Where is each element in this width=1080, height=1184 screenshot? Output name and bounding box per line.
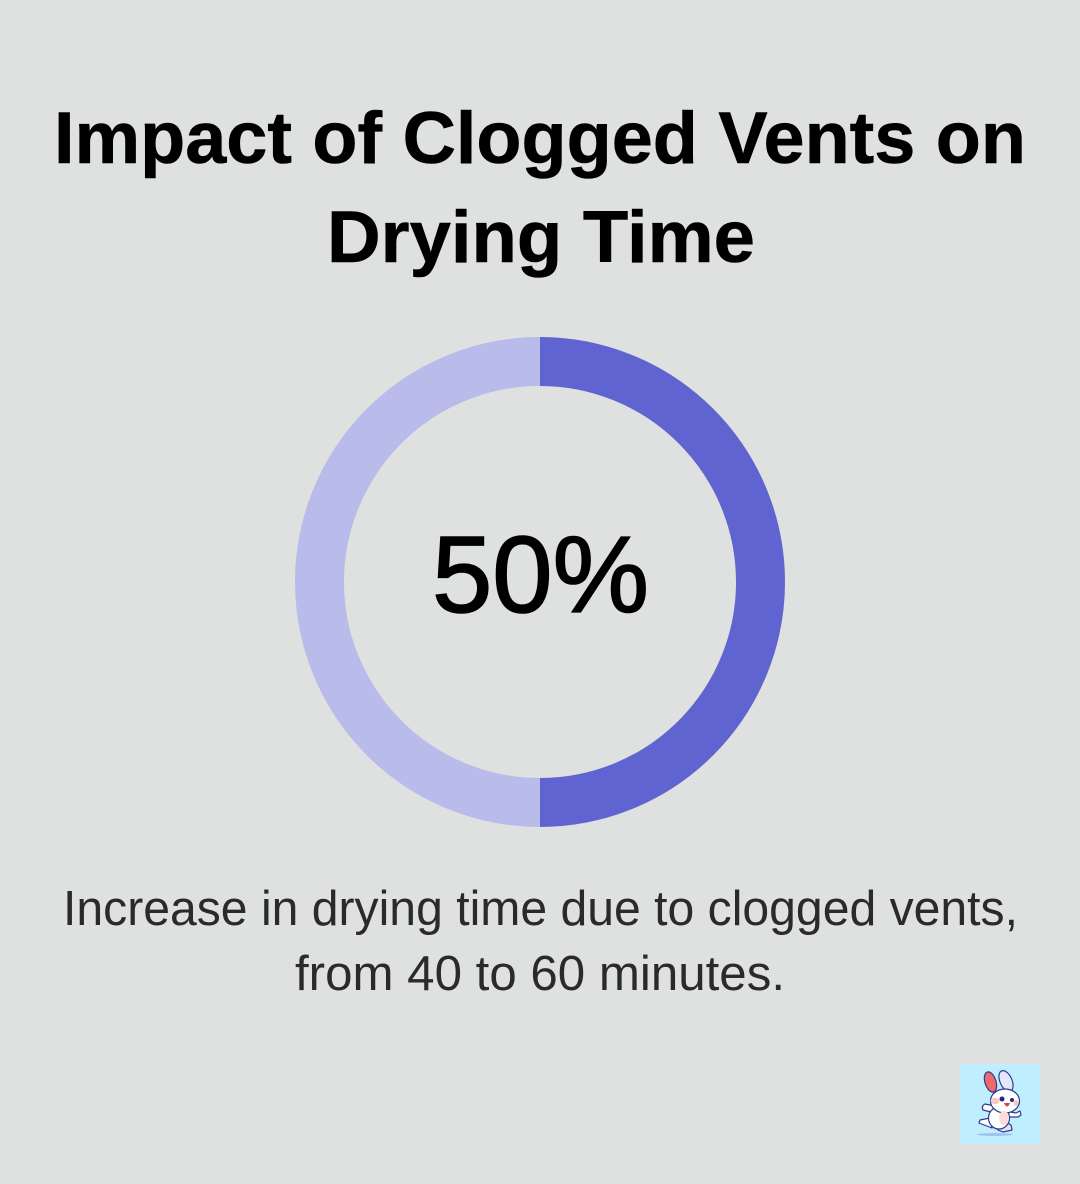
icon: rabbit logo [960, 1064, 1040, 1144]
description text [63, 882, 1018, 1001]
arms [982, 1104, 995, 1113]
title: Drying Time [327, 197, 755, 278]
head [990, 1089, 1020, 1113]
description text: from 40 to 60 minutes. [295, 947, 785, 1001]
title [54, 98, 1026, 278]
highlighted ring segment [540, 362, 760, 802]
body [988, 1107, 1010, 1129]
title: Impact of Clogged Vents on [54, 98, 1026, 179]
left ear [982, 1070, 999, 1094]
center value: 50% [432, 514, 649, 636]
description text: Increase in drying time due to clogged vents, [63, 882, 1018, 936]
remaining ring segment [320, 362, 540, 802]
right ear [996, 1069, 1016, 1093]
donut chart: 50% [320, 362, 760, 802]
legs [979, 1118, 992, 1128]
